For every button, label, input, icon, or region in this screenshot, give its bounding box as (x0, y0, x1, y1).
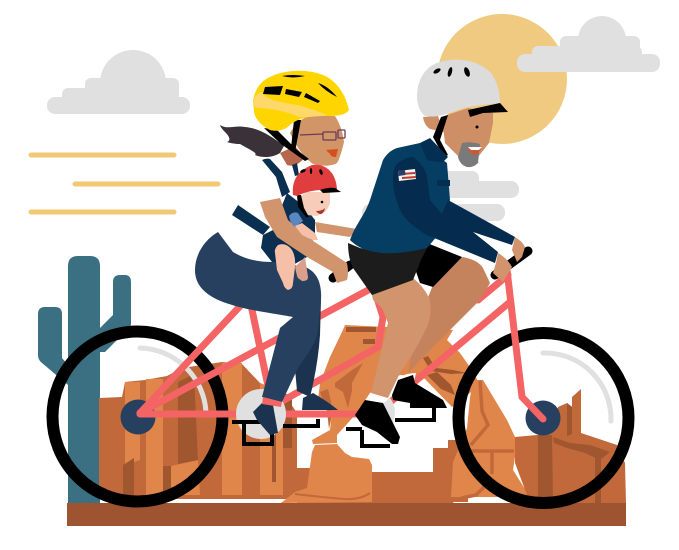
face (443, 108, 493, 158)
glasses (300, 130, 345, 140)
baby eye (321, 201, 323, 203)
socks (262, 397, 282, 407)
speed lines (31, 155, 218, 212)
neck (280, 146, 305, 166)
canyon: stair step (433, 440, 468, 502)
man helmet (417, 60, 500, 117)
baby (275, 244, 308, 290)
helmet strap (264, 120, 309, 161)
baby near leg (275, 244, 295, 290)
canyon: top ledge shadows (346, 327, 467, 395)
hubs (120, 400, 560, 436)
crank disc (236, 389, 286, 439)
near shorts (348, 243, 427, 295)
eye (476, 126, 478, 128)
near shoe (355, 400, 400, 444)
baby far leg (295, 257, 308, 281)
baby helmet strap (297, 195, 309, 217)
canyon: right mesa shadows (538, 403, 610, 503)
rear wheel (52, 332, 222, 502)
canyon: centre lower rock (281, 444, 372, 503)
lips (326, 149, 338, 157)
cloud: top left (47, 50, 190, 114)
far shoe sock (398, 373, 416, 384)
baby helmet (293, 165, 337, 196)
baby helmet vents (300, 168, 323, 175)
jacket pocket (437, 180, 450, 186)
baby arm (295, 223, 318, 240)
pedals (232, 408, 434, 446)
ponytail (220, 125, 284, 157)
baby mouth (316, 208, 325, 214)
woman helmet (253, 71, 349, 131)
head (290, 116, 344, 166)
helmet vents (263, 75, 337, 103)
helmet visor (468, 103, 508, 117)
baby carrier (232, 193, 315, 265)
baby sleeve (289, 212, 303, 227)
near shoe (253, 403, 278, 435)
far shoe (302, 393, 338, 410)
ground (67, 503, 626, 526)
canyon: centre upper rock (312, 325, 480, 444)
canyon: lower rock crease (295, 493, 370, 499)
sun (437, 14, 567, 144)
woman near arm (260, 198, 348, 283)
far shoe (392, 375, 447, 408)
front wheel (458, 333, 628, 503)
far leg (408, 257, 490, 373)
canyon: left mesa (99, 362, 310, 499)
cactus (38, 256, 131, 504)
cloud: top right (517, 16, 660, 72)
teeth (468, 147, 482, 150)
canyon: right light rock (451, 380, 530, 497)
canyon: right rock creases (452, 381, 514, 501)
handlebars (333, 251, 528, 278)
helmet stripe (253, 92, 327, 117)
helmet strap (433, 115, 448, 157)
flag patch (398, 169, 416, 181)
canyon: left mesa shadows (123, 374, 292, 495)
canyon: centre base (297, 472, 453, 503)
woman rider (195, 71, 357, 435)
beard (458, 142, 480, 167)
far leg (295, 270, 321, 397)
far carrier strap (292, 163, 299, 176)
baby upper body (289, 165, 341, 240)
canyon: centre rock shadows (320, 363, 363, 429)
canyon: right mesa (515, 389, 626, 503)
baby head (299, 192, 330, 216)
near leg (371, 278, 431, 398)
near leg (195, 232, 321, 402)
mouth (467, 147, 482, 155)
carrier strap (262, 159, 290, 197)
jacket (350, 143, 450, 253)
jacket arm (393, 157, 515, 263)
far arm (315, 222, 357, 237)
front crank disc (383, 398, 395, 424)
canyon landscape (67, 325, 626, 526)
baby helmet visor (320, 188, 341, 193)
sock (368, 393, 387, 404)
far shorts (413, 243, 462, 287)
man rider (348, 60, 525, 444)
canyon: left mesa light columns (125, 363, 283, 495)
bicycle frame (140, 270, 543, 419)
cloud: behind rider (362, 171, 519, 221)
jacket collar (420, 138, 448, 162)
neck and ear (423, 116, 444, 132)
helmet vents (433, 66, 471, 78)
hands (493, 237, 525, 282)
